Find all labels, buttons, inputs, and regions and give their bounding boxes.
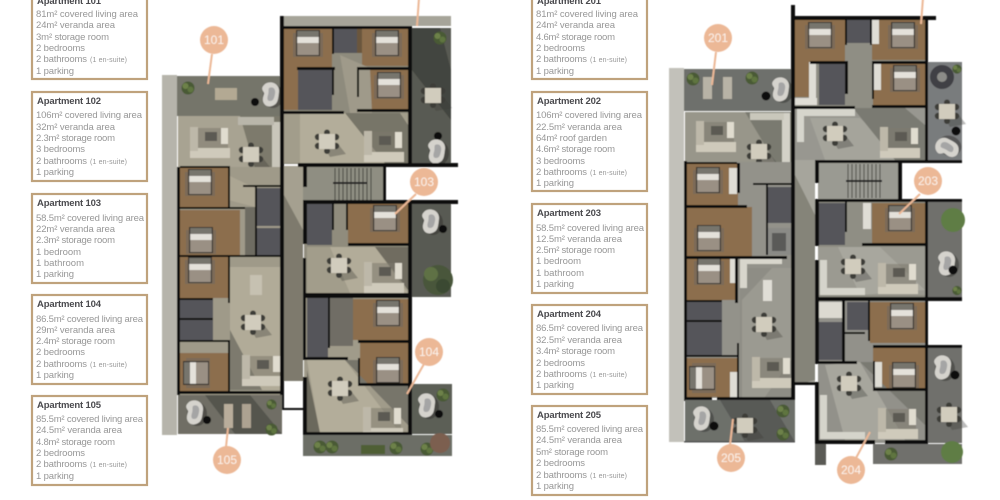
specs: apartment 105: (1 en-suite): [90, 462, 127, 469]
terrace: apartment 202: [928, 62, 966, 161]
heading: apartment 202: Apartment 202: [537, 96, 601, 107]
specs: apartment 201: [536, 9, 639, 77]
specs: apartment 101: (1 en-suite): [90, 57, 127, 64]
terrace: apartment 103: [412, 204, 453, 297]
terrace: apartment 204: [815, 348, 968, 465]
specs: apartment 104: [36, 314, 144, 381]
heading: apartment 105: Apartment 105: [37, 400, 102, 411]
callout: 101: 101: [204, 33, 224, 47]
specs: apartment 104: 1 parking: [36, 370, 74, 381]
specs: apartment 104: (1 en-suite): [90, 362, 127, 369]
specs: apartment 102: 1 parking: [36, 167, 74, 178]
specs: apartment 201: 4.6m² storage room: [536, 32, 615, 43]
panel: apartment 101 details: [32, 0, 147, 79]
specs: apartment 201: 2 bedrooms: [536, 43, 585, 54]
callout: 204: 204: [841, 463, 861, 477]
specs: apartment 205: 85.5m² covered living area: [536, 424, 644, 435]
panel: apartment 105 details: [32, 396, 147, 485]
interior: apartment 202: [791, 5, 936, 165]
panel: apartment 203 details: [532, 204, 647, 293]
specs: apartment 201: 2 bathrooms: [536, 54, 587, 65]
specs: apartment 101: 2 bedrooms: [36, 43, 85, 54]
upper walls: second floor core: [815, 160, 962, 202]
specs: apartment 203: [536, 223, 645, 290]
specs: apartment 202: 4.6m² storage room: [536, 144, 615, 155]
terrace: apartment 203: [928, 202, 965, 297]
interior: apartment 205: [684, 160, 795, 401]
specs: apartment 203: 1 parking: [536, 279, 574, 290]
callout: 101: [200, 26, 228, 84]
specs: apartment 103: 22m² veranda area: [36, 224, 116, 235]
callout: 203: 203: [918, 174, 938, 188]
interior: apartment 201: [685, 112, 792, 167]
panel: apartment 204 details: [532, 305, 647, 394]
specs: apartment 103: 1 bedroom: [36, 247, 81, 258]
heading: apartment 205: Apartment 205: [537, 410, 602, 421]
stairwell: [303, 167, 386, 201]
terrace: apartment 205: [684, 400, 795, 442]
specs: apartment 105: [36, 414, 144, 482]
specs: apartment 102: 3 bedrooms: [36, 144, 85, 155]
specs: apartment 202: 1 parking: [536, 178, 574, 189]
specs: apartment 104: 2.4m² storage room: [36, 336, 115, 347]
specs: apartment 105: 2 bedrooms: [36, 448, 85, 459]
specs: apartment 103: 2.3m² storage room: [36, 235, 115, 246]
panel: apartment 201 details: [532, 0, 647, 79]
panel: apartment 202 details: [532, 92, 647, 191]
heading: apartment 203: Apartment 203: [537, 208, 601, 219]
specs: apartment 204: 86.5m² covered living area: [536, 323, 644, 334]
specs: apartment 202: 3 bedrooms: [536, 156, 585, 167]
planter strip: apartment 104: [303, 433, 452, 456]
interior: apartment 105: [177, 166, 284, 410]
specs: apartment 204: [536, 323, 644, 391]
interior: apartment 104: [303, 298, 412, 438]
callout: 203: [899, 167, 942, 214]
terrace: apartment 101: [177, 76, 283, 116]
callout: 205: [717, 419, 745, 472]
specs: apartment 202: 2 bathrooms: [536, 167, 587, 178]
specs: apartment 205: 24.5m² veranda area: [536, 435, 623, 446]
specs: apartment 105: 2 bathrooms: [36, 459, 87, 470]
specs: apartment 103: [36, 213, 145, 280]
specs: apartment 205: 2 bathrooms: [536, 470, 587, 481]
interior: apartment 102: [280, 16, 412, 168]
specs: apartment 205: 5m² storage room: [536, 447, 608, 458]
specs: apartment 102: 2 bathrooms: [36, 156, 87, 167]
stairwell: [815, 163, 902, 200]
specs: apartment 101: [36, 9, 139, 77]
specs: apartment 203: 1 bathroom: [536, 268, 584, 279]
specs: apartment 101: 81m² covered living area: [36, 9, 139, 20]
specs: apartment 204: 1 parking: [536, 380, 574, 391]
specs: apartment 102: [36, 110, 143, 178]
specs: apartment 201: (1 en-suite): [590, 57, 627, 64]
callout: 103: [395, 168, 438, 214]
specs: apartment 202: 106m² covered living area: [536, 110, 643, 121]
corridor: [795, 160, 817, 385]
specs: apartment 104: 2 bedrooms: [36, 347, 85, 358]
specs: apartment 205: 2 bedrooms: [536, 458, 585, 469]
specs: apartment 101: 3m² storage room: [36, 32, 109, 43]
specs: apartment 105: 24.5m² veranda area: [36, 425, 123, 436]
callout: 102 pointer: [417, 0, 419, 26]
interior: apartment 203: [815, 202, 962, 301]
specs: apartment 203: 12.5m² veranda area: [536, 234, 623, 245]
specs: apartment 202: 22.5m² veranda area: [536, 122, 623, 133]
specs: apartment 104: 86.5m² covered living area: [36, 314, 144, 325]
specs: apartment 103: 1 parking: [36, 269, 74, 280]
callout: 201: [704, 24, 732, 85]
callout: 105: [213, 428, 241, 474]
specs: apartment 202: [536, 110, 643, 189]
interior: apartment 101: [178, 116, 282, 170]
specs: apartment 204: 32.5m² veranda area: [536, 335, 623, 346]
callout: 202 pointer: [921, 0, 923, 24]
specs: apartment 201: 81m² covered living area: [536, 9, 639, 20]
specs: apartment 205: 1 parking: [536, 481, 574, 492]
specs: apartment 205: (1 en-suite): [590, 473, 627, 480]
specs: apartment 105: 1 parking: [36, 471, 74, 482]
specs: apartment 101: 2 bathrooms: [36, 54, 87, 65]
heading: apartment 103: Apartment 103: [37, 198, 101, 209]
callout: 201: 201: [708, 31, 728, 45]
specs: apartment 101: 1 parking: [36, 66, 74, 77]
interior: apartment 103: [303, 204, 412, 298]
specs: apartment 202: (1 en-suite): [590, 170, 627, 177]
heading: apartment 104: Apartment 104: [37, 299, 102, 310]
specs: apartment 201: 1 parking: [536, 66, 574, 77]
specs: apartment 102: 2.3m² storage room: [36, 133, 115, 144]
panel: apartment 103 details: [32, 194, 147, 283]
panel: apartment 205 details: [532, 406, 647, 495]
panel: apartment 102 details: [32, 92, 147, 181]
floor plan: second floor: [669, 0, 968, 484]
interior: apartment 204: [815, 301, 962, 444]
callout: 104: [407, 338, 443, 394]
corridor: [281, 166, 306, 410]
specs: apartment 103: 58.5m² covered living area: [36, 213, 145, 224]
specs: apartment 105: 4.8m² storage room: [36, 437, 115, 448]
specs: apartment 102: 32m² veranda area: [36, 122, 116, 133]
floor plan: first floor: [162, 0, 458, 474]
specs: apartment 204: 2 bedrooms: [536, 358, 585, 369]
specs: apartment 203: 58.5m² covered living area: [536, 223, 645, 234]
callout: 204: [837, 432, 870, 484]
specs: apartment 204: 3.4m² storage room: [536, 346, 615, 357]
callout: 103: 103: [414, 175, 434, 189]
terrace: apartment 105: [178, 395, 282, 436]
specs: apartment 101: 24m² veranda area: [36, 20, 116, 31]
specs: apartment 201: 24m² veranda area: [536, 20, 616, 31]
terrace: apartment 102: [412, 28, 452, 165]
specs: apartment 104: 29m² veranda area: [36, 325, 116, 336]
callout: 105: 105: [217, 453, 237, 467]
specs: apartment 204: (1 en-suite): [590, 372, 627, 379]
specs: apartment 203: 1 bedroom: [536, 256, 581, 267]
top terrace strip: [284, 16, 451, 26]
specs: apartment 103: 1 bathroom: [36, 258, 84, 269]
terrace: apartment 201: [684, 69, 793, 111]
specs: apartment 204: 2 bathrooms: [536, 369, 587, 380]
specs: apartment 105: 85.5m² covered living area: [36, 414, 144, 425]
specs: apartment 104: 2 bathrooms: [36, 359, 87, 370]
heading: apartment 204: Apartment 204: [537, 309, 602, 320]
specs: apartment 102: (1 en-suite): [90, 159, 127, 166]
specs: apartment 203: 2.5m² storage room: [536, 245, 615, 256]
upper walls: first floor core: [298, 163, 458, 204]
heading: apartment 102: Apartment 102: [37, 96, 101, 107]
callout: 205: 205: [721, 451, 741, 465]
specs: apartment 205: [536, 424, 644, 492]
specs: apartment 202: 64m² roof garden: [536, 133, 607, 144]
callout: 104: 104: [419, 345, 439, 359]
panel: apartment 104 details: [32, 295, 147, 384]
terrace: apartment 104: [412, 384, 452, 434]
specs: apartment 102: 106m² covered living area: [36, 110, 143, 121]
